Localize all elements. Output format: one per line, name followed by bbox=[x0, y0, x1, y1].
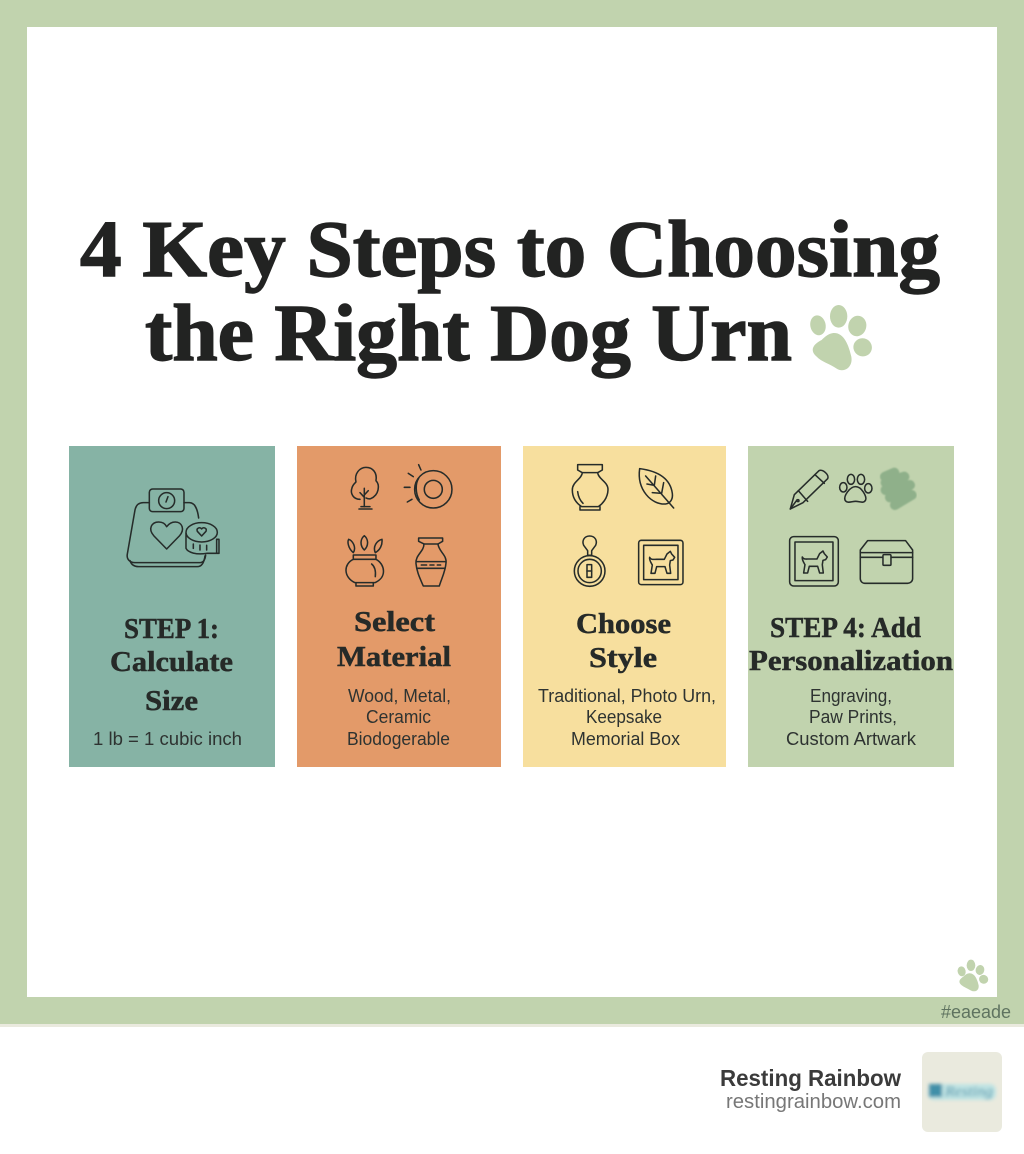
icon: keepsake pendant bbox=[574, 536, 605, 586]
heading: STEP 4: Add bbox=[770, 612, 921, 644]
icon: leaf bbox=[639, 469, 674, 508]
logo tile: Resting bbox=[944, 1084, 994, 1100]
heading: Select bbox=[354, 606, 435, 638]
icon: title paw bbox=[808, 305, 875, 370]
description: Wood, Metal, bbox=[348, 686, 451, 706]
description: Custom Artwark bbox=[786, 729, 917, 749]
icon: paint swatch bbox=[885, 473, 912, 505]
description: Paw Prints, bbox=[809, 707, 897, 727]
icon: metal plate bbox=[404, 465, 452, 508]
description: Engraving, bbox=[810, 686, 892, 706]
description: Traditional, Photo Urn, bbox=[538, 686, 716, 706]
icon: paw print outline bbox=[840, 474, 872, 502]
heading bbox=[749, 612, 953, 677]
heading: Material bbox=[337, 641, 451, 673]
description bbox=[786, 686, 917, 749]
heading: Style bbox=[589, 642, 657, 674]
logo tile bbox=[922, 1052, 1002, 1132]
description: 1 lb = 1 cubic inch bbox=[93, 729, 242, 749]
icon: dog photo frame bbox=[790, 537, 838, 586]
title: 4 Key Steps to Choosing bbox=[80, 206, 940, 294]
title bbox=[80, 206, 940, 378]
icon: decorated vase bbox=[416, 538, 446, 586]
panel: step 2 select material bbox=[297, 446, 501, 767]
heading bbox=[576, 608, 671, 674]
description: Biodogerable bbox=[347, 729, 450, 749]
icon: traditional urn bbox=[572, 465, 608, 510]
heading: Calculate bbox=[110, 646, 233, 678]
footer url: restingrainbow.com bbox=[726, 1091, 901, 1113]
panel: step 1 calculate size bbox=[69, 446, 275, 767]
description bbox=[347, 686, 451, 749]
heading: Size bbox=[145, 685, 198, 717]
description: Keepsake bbox=[586, 707, 662, 727]
heading: Personalization bbox=[749, 645, 953, 677]
description: Memorial Box bbox=[571, 729, 680, 749]
icon: scale and measuring tape bbox=[127, 489, 219, 567]
panel: step 4 add personalization bbox=[748, 446, 954, 767]
heading: STEP 1: bbox=[124, 613, 219, 645]
colour code label: #eaeade bbox=[941, 1002, 1011, 1022]
icon: tree bbox=[351, 467, 378, 509]
footer brand name: Resting Rainbow bbox=[720, 1065, 901, 1091]
icon: corner paw bbox=[957, 960, 990, 991]
title: the Right Dog Urn bbox=[145, 290, 792, 378]
icon: ceramic pot with leaves bbox=[346, 536, 383, 586]
icon: engraving pen bbox=[790, 470, 828, 509]
heading bbox=[337, 606, 451, 673]
heading: Choose bbox=[576, 608, 671, 640]
heading bbox=[110, 613, 233, 717]
icon: photo frame with dog bbox=[639, 540, 683, 585]
description: Ceramic bbox=[366, 707, 431, 727]
icon: memorial chest bbox=[860, 541, 913, 583]
panel: step 3 choose style bbox=[523, 446, 726, 767]
description bbox=[538, 686, 716, 749]
